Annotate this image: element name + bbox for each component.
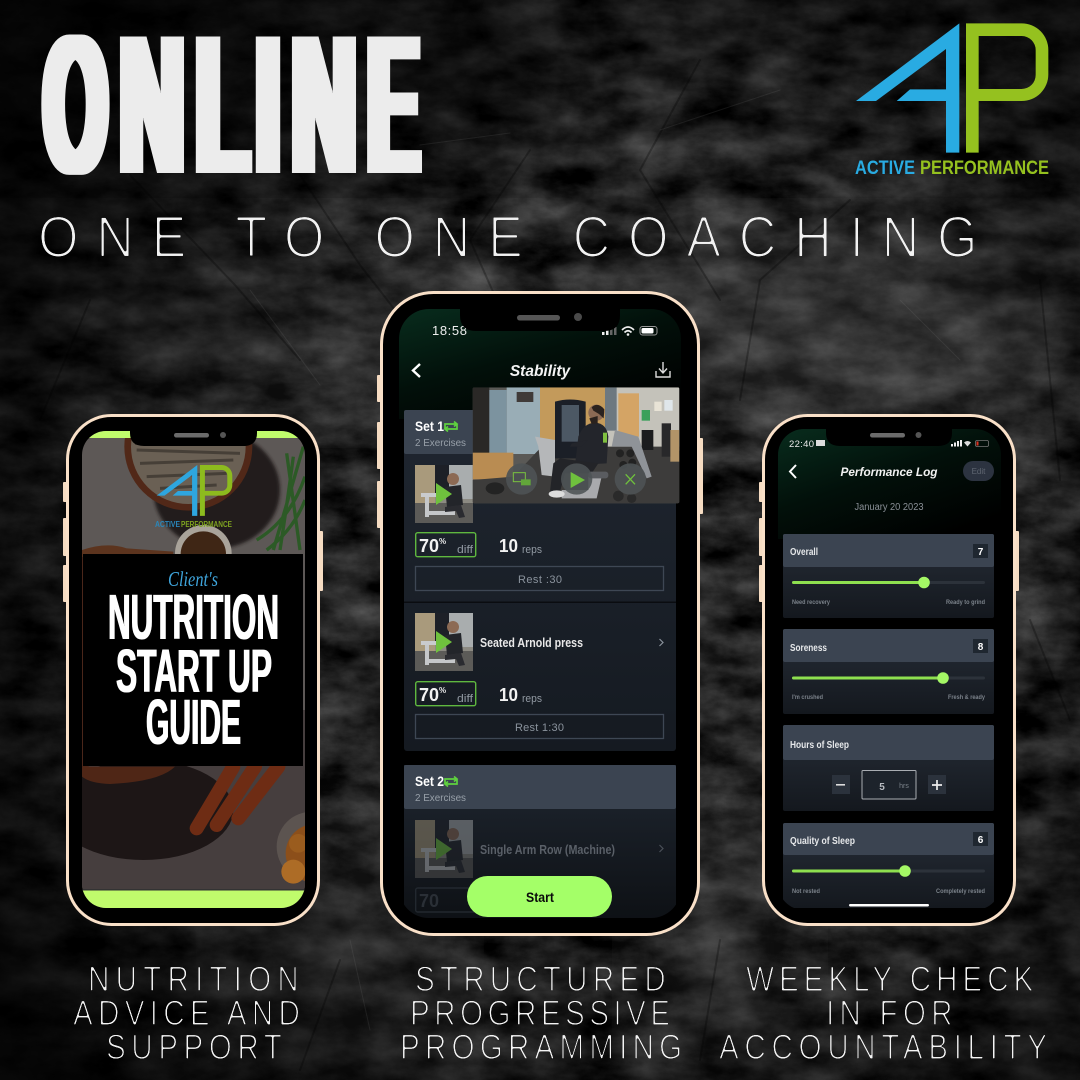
status bar	[433, 326, 658, 336]
set 1 card: 2 Exercises	[415, 437, 466, 449]
header: Stability	[510, 363, 572, 380]
status bar: 22:40	[789, 439, 814, 450]
set 2 card: 70	[419, 891, 439, 911]
set 1 card: diff	[457, 544, 474, 556]
subtitle: one to one coaching: ONE TO ONE COACHING	[38, 204, 978, 270]
caption: structured progressive programming: PROGRESSIVE	[410, 994, 670, 1033]
caption: nutrition advice and support: NUTRITION	[88, 960, 299, 999]
header	[413, 362, 670, 380]
card: soreness: I'm crushed	[792, 694, 823, 701]
set 1 card: 70	[419, 685, 439, 705]
app screen	[399, 309, 681, 925]
logo: Active Performance: ACTIVE	[855, 158, 915, 179]
card: overall: Need recovery	[792, 599, 830, 606]
set 1 card: 70	[419, 536, 439, 556]
set 2 card: Single Arm Row (Machine)	[480, 843, 615, 857]
caption: structured progressive programming: PROGRAMMING	[400, 1028, 682, 1067]
set 1 card: %	[439, 537, 446, 546]
header: Performance Log	[840, 465, 938, 479]
caption: weekly check in for accountability: IN FOR	[826, 994, 953, 1033]
phone body	[382, 292, 698, 934]
set 1 card: diff	[457, 693, 474, 705]
title: ONLINE: O	[44, 0, 107, 214]
set 1 card: reps	[522, 544, 542, 556]
header	[790, 461, 994, 513]
caption: structured progressive programming	[400, 960, 682, 1067]
phone body	[764, 416, 1014, 924]
phone side buttons	[759, 482, 1019, 602]
status bar	[789, 440, 989, 447]
card: overall: 7	[978, 547, 984, 558]
card: soreness: Soreness	[790, 643, 827, 654]
small logo: ACTIVE	[155, 520, 181, 529]
phone: stability workout	[377, 292, 703, 934]
caption: nutrition advice and support: ADVICE AND	[73, 994, 300, 1033]
title: ONLINE	[44, 0, 419, 214]
card: quality of sleep: Completely rested	[936, 888, 985, 895]
guide title box: Client's	[168, 567, 218, 591]
card: overall	[783, 534, 994, 618]
video overlay: gym photo	[473, 387, 679, 503]
caption: nutrition advice and support	[73, 960, 300, 1067]
card: overall: Overall	[790, 547, 818, 558]
guide title box: GUIDE	[146, 686, 241, 758]
status bar: 18:58	[432, 323, 468, 338]
phone body	[68, 416, 318, 924]
card: quality of sleep: 6	[978, 835, 984, 846]
phone side buttons	[377, 375, 703, 528]
logo: Active Performance: PERFORMANCE	[920, 158, 1049, 179]
caption: weekly check in for accountability	[719, 960, 1047, 1067]
text: E	[368, 0, 419, 214]
home indicator	[849, 904, 929, 906]
lime bars	[82, 431, 305, 438]
title: ONLINE: N	[120, 0, 184, 214]
set 1 card: reps	[522, 693, 542, 705]
small logo	[155, 465, 233, 529]
app screen	[778, 429, 1001, 910]
notch	[826, 427, 952, 446]
card: quality of sleep: Quality of Sleep	[790, 836, 855, 847]
set 1 card: Rest :30	[518, 574, 562, 586]
card: hours of sleep: hrs	[899, 783, 909, 790]
notch	[460, 307, 620, 331]
caption: nutrition advice and support: SUPPORT	[106, 1028, 282, 1067]
caption: weekly check in for accountability: WEEKLY CHECK	[746, 960, 1034, 999]
logo: Active Performance	[855, 23, 1049, 179]
set 1 card: Set 1	[415, 418, 444, 434]
notch	[130, 429, 257, 446]
caption: weekly check in for accountability: ACCOUNTABILITY	[719, 1028, 1047, 1067]
guide title box: NUTRITION	[108, 581, 279, 653]
header: January 20 2023	[854, 502, 924, 513]
start button	[467, 876, 612, 917]
caption: structured progressive programming: STRUCTURED	[415, 960, 666, 999]
title: ONLINE: N	[292, 0, 356, 214]
video controls	[506, 463, 646, 495]
phone: nutrition guide	[63, 414, 323, 926]
phone: performance log	[759, 416, 1019, 924]
set 1 card: %	[439, 686, 446, 695]
card: hours of sleep: 5	[879, 782, 885, 793]
card: hours of sleep	[783, 725, 994, 811]
small logo: PERFORMANCE	[181, 520, 233, 529]
title: ONLINE: L	[196, 0, 249, 214]
set 2 card	[404, 765, 676, 925]
card: quality of sleep	[783, 823, 994, 908]
card: soreness: Fresh & ready	[948, 694, 985, 701]
set 2 card: 2 Exercises	[415, 792, 466, 804]
card: overall: Ready to grind	[946, 599, 985, 606]
food photo screen	[82, 431, 305, 908]
card: soreness	[783, 629, 994, 714]
guide title box	[83, 554, 303, 766]
set 1 card: Seated Arnold press	[480, 636, 583, 650]
card: quality of sleep: Not rested	[792, 888, 820, 895]
set 1 card: 10	[499, 685, 518, 705]
guide title box: START UP	[116, 637, 272, 705]
title: ONLINE: I	[256, 0, 280, 214]
card: soreness: 8	[978, 642, 984, 653]
header: Edit	[972, 467, 986, 476]
set 2 card: Set 2	[415, 773, 444, 789]
start button: Start	[526, 889, 554, 905]
set 1 card	[404, 410, 676, 751]
card: hours of sleep: Hours of Sleep	[790, 740, 849, 751]
set 1 card: Rest 1:30	[515, 722, 564, 734]
set 1 card: 10	[499, 536, 518, 556]
phone side buttons	[63, 482, 323, 602]
